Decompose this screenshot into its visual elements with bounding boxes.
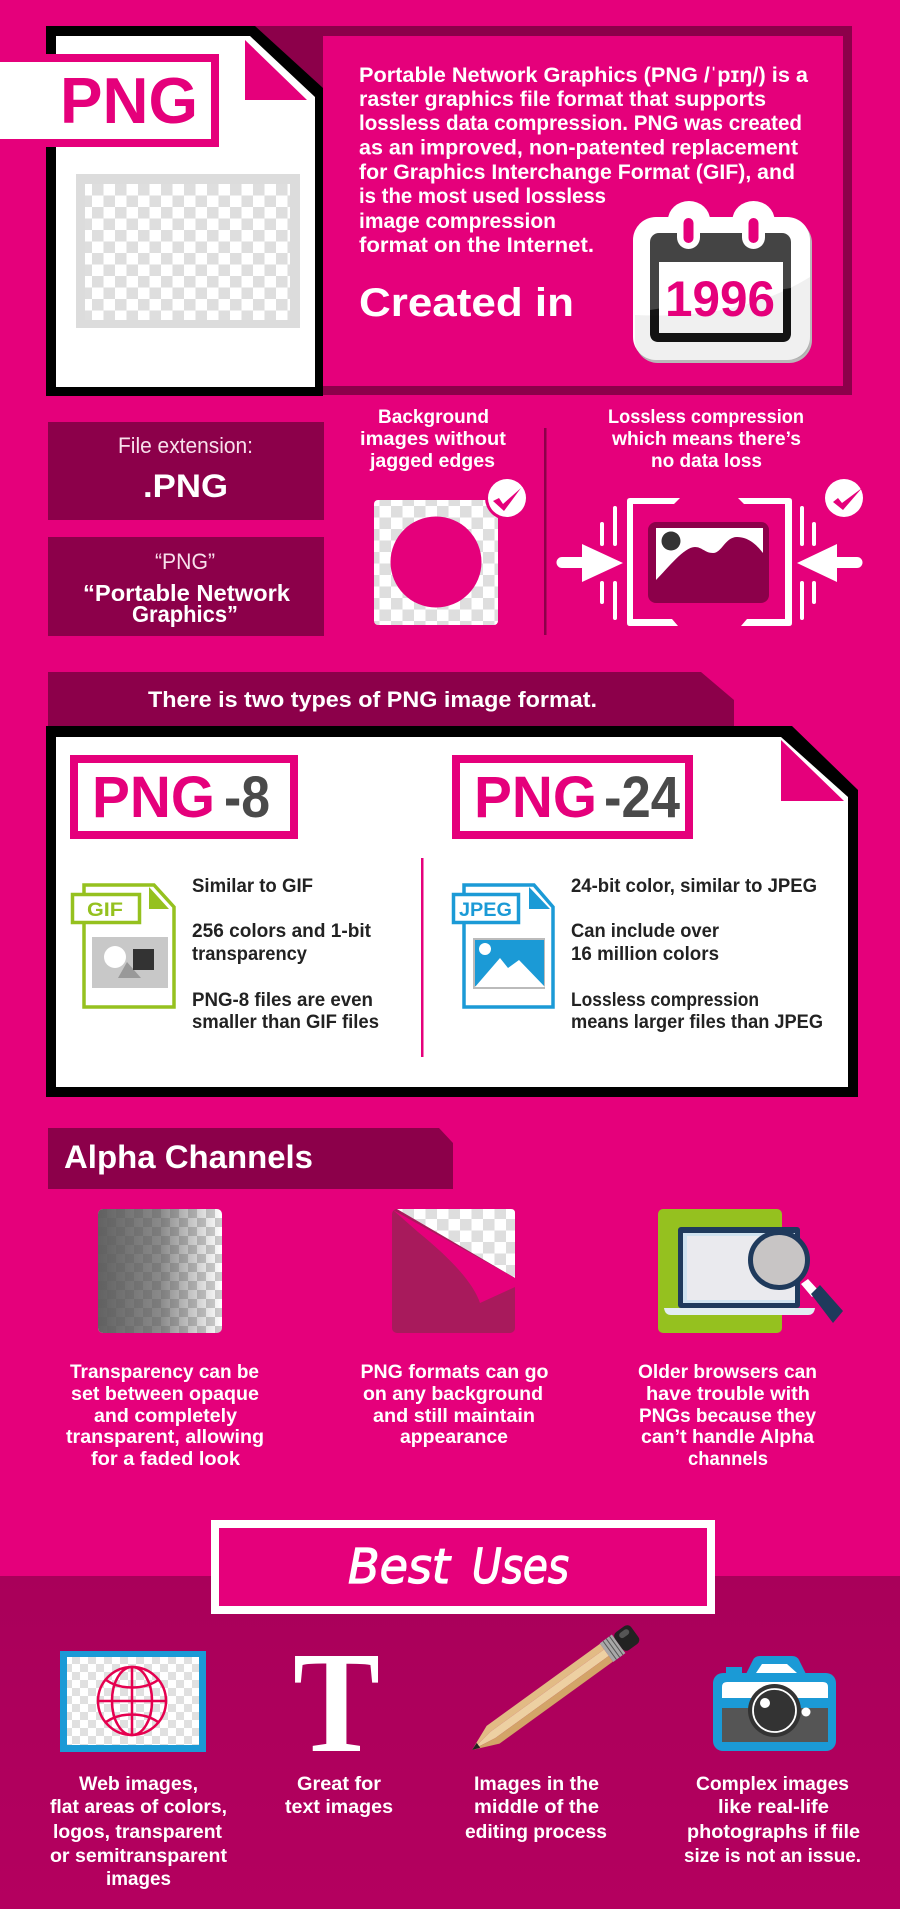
heading: two types [48, 672, 734, 730]
use text 4: like real-life [718, 1796, 829, 1818]
use text 1: logos, transparent [53, 1821, 222, 1843]
intro text: for Graphics Interchange Format (GIF), and [359, 161, 795, 184]
use text 4 [684, 1773, 861, 1867]
use text 4: size is not an issue. [684, 1845, 861, 1867]
intro text: lossless data compression. PNG was created [359, 112, 802, 135]
background images caption: jagged edges [369, 450, 495, 472]
panel frame [46, 726, 858, 1097]
alpha text 1: transparent, allowing [66, 1426, 264, 1448]
heading: best uses [215, 1524, 711, 1610]
background images caption [360, 406, 507, 472]
panel: file extension: File extension: [118, 433, 253, 458]
intro text: image compression [359, 210, 556, 233]
panel: PNG name: “PNG” [155, 549, 215, 574]
heading: best uses: Uses [472, 1539, 569, 1595]
use text 1: images [106, 1868, 171, 1890]
alpha text 2: PNG formats can go [360, 1361, 549, 1383]
icon: camera [713, 1656, 836, 1751]
alpha text 3 [638, 1361, 817, 1470]
alpha text 3: Older browsers can [638, 1361, 817, 1383]
lossless compression caption [608, 406, 804, 472]
icon: letter T: T [293, 1623, 380, 1783]
divider [544, 428, 546, 635]
use text 1 [50, 1773, 227, 1890]
icon: web globe [60, 1651, 206, 1752]
PNG-24 title [456, 759, 689, 835]
lossless compression caption: Lossless compression [608, 406, 804, 428]
created in heading: Created in [359, 281, 574, 325]
lossless compression caption: no data loss [651, 450, 762, 472]
PNG-8 title [74, 759, 294, 835]
use text 4: Complex images [696, 1773, 849, 1795]
icon: JPEG file [454, 885, 553, 1007]
divider [421, 858, 424, 1057]
use text 2: Great for [297, 1773, 381, 1795]
alpha text 2: appearance [400, 1426, 508, 1448]
alpha text 3: have trouble with [646, 1383, 810, 1405]
intro text: as an improved, non-patented replacement [359, 136, 798, 160]
background images caption: Background [378, 406, 489, 428]
use text 1: Web images, [79, 1773, 198, 1795]
icon: calendar 1996 [633, 201, 812, 363]
heading: alpha channels: Alpha Channels [64, 1139, 313, 1175]
panel: intro [0, 26, 852, 396]
PNG-8 text: Similar to GIF [192, 876, 313, 897]
alpha text 2: on any background [363, 1383, 543, 1405]
PNG-8 text: smaller than GIF files [192, 1012, 379, 1033]
use text 3: editing process [465, 1821, 607, 1843]
intro text: Portable Network Graphics (PNG /ˈpɪŋ/) is a [359, 64, 808, 87]
alpha text 3: can’t handle Alpha [641, 1426, 814, 1448]
PNG label: PNG [60, 64, 198, 137]
icon: GIF file [72, 885, 174, 1007]
PNG-24 text: Lossless compression [571, 990, 759, 1011]
alpha text 3: PNGs because they [639, 1405, 816, 1427]
panel: file extension: .PNG [143, 468, 228, 504]
PNG-8 text [192, 876, 379, 1033]
alpha text 2 [360, 1361, 549, 1448]
PNG-8 text: 256 colors and 1-bit [192, 921, 372, 942]
alpha text 1: and completely [94, 1405, 237, 1427]
icon: opacity gradient [98, 1209, 222, 1333]
use text 1: flat areas of colors, [50, 1796, 227, 1818]
alpha text 3: channels [688, 1448, 768, 1470]
icon: laptop with magnifier [658, 1209, 843, 1333]
panel: PNG name: “Portable Network [83, 580, 290, 606]
heading: two types: There is two types of PNG image format. [148, 687, 597, 712]
lossless compression caption: which means there’s [611, 428, 801, 450]
use text 4: photographs if file [687, 1821, 860, 1843]
PNG label [0, 54, 219, 147]
PNG-8 text: PNG-8 files are even [192, 990, 373, 1011]
PNG-24 text: 16 million colors [571, 944, 719, 965]
alpha text 1: for a faded look [91, 1448, 240, 1470]
background images caption: images without [360, 428, 507, 450]
bottom section background [0, 1576, 900, 1909]
use text 2 [285, 1773, 393, 1818]
use text 1: or semitransparent [50, 1845, 227, 1867]
intro text: raster graphics file format that supports [359, 88, 766, 111]
PNG-24 text [571, 876, 823, 1033]
heading: best uses: Best [348, 1539, 452, 1595]
panel: PNG name [48, 537, 324, 636]
intro frame [46, 26, 852, 395]
icon: checker square with circle [374, 476, 529, 625]
PNG-8 text: transparency [192, 944, 307, 965]
alpha text 1: set between opaque [71, 1383, 259, 1405]
PNG-24 text: 24-bit color, similar to JPEG [571, 876, 817, 897]
icon: page curl [392, 1209, 515, 1333]
icon: compression [556, 479, 863, 626]
alpha text 2: and still maintain [373, 1405, 535, 1427]
icon: PNG file [46, 26, 323, 396]
PNG-24 title: -24 [604, 765, 680, 830]
PNG-24 text: Can include over [571, 921, 720, 942]
panel: PNG types [46, 726, 858, 1097]
use text 3: middle of the [474, 1796, 599, 1818]
use text 2: text images [285, 1796, 393, 1818]
panel: PNG name: Graphics” [132, 601, 238, 627]
alpha text 1: Transparency can be [70, 1361, 259, 1383]
use text 3: Images in the [474, 1773, 599, 1795]
alpha text 1 [66, 1361, 264, 1470]
PNG-24 text: means larger files than JPEG [571, 1012, 823, 1033]
PNG-8 title: -8 [224, 765, 270, 830]
icon: JPEG file: JPEG [459, 900, 512, 921]
intro text: format on the Internet. [359, 234, 594, 257]
icon: pencil [465, 1623, 642, 1759]
icon: calendar 1996: 1996 [665, 271, 775, 327]
heading: alpha channels [48, 1128, 453, 1189]
intro text: is the most used lossless [359, 185, 606, 208]
use text 3 [465, 1773, 607, 1843]
PNG-24 title: PNG [474, 765, 597, 830]
panel: file extension [48, 422, 324, 520]
PNG-8 title: PNG [92, 765, 215, 830]
intro text [359, 64, 808, 257]
icon: GIF file: GIF [87, 900, 123, 921]
